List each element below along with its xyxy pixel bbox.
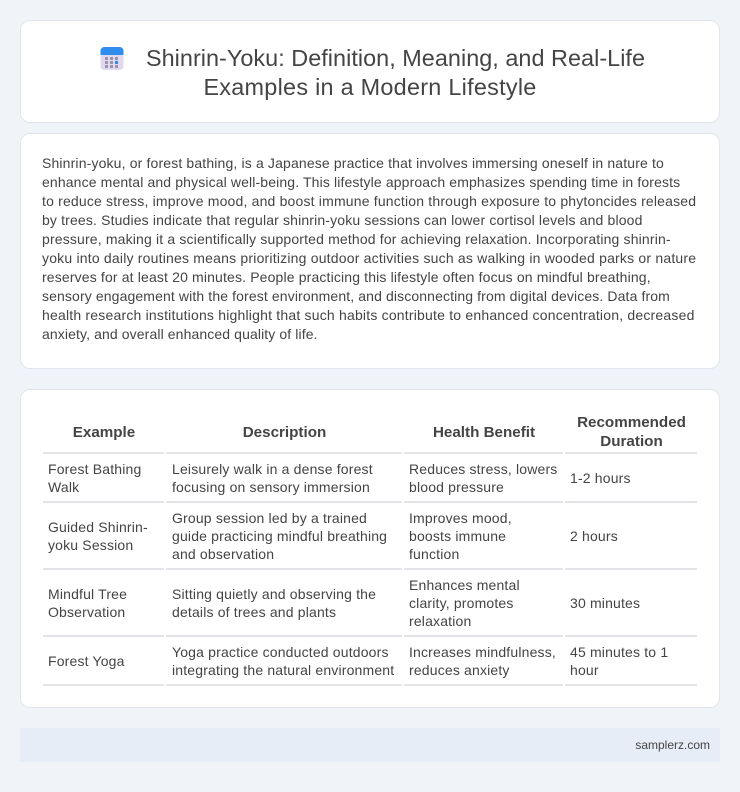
title — [146, 45, 645, 100]
intro paragraph: by trees. Studies indicate that regular shinrin-yoku sessions can lower cortisol levels and blood — [42, 212, 643, 228]
row: Forest Bathing Walk: Walk — [48, 479, 79, 495]
row: Forest Yoga — [48, 644, 668, 678]
row: Forest Bathing Walk: Reduces stress, lowers — [409, 461, 557, 477]
panel: intro text — [20, 133, 720, 369]
row: Mindful Tree Observation: Mindful Tree — [48, 586, 127, 602]
table header: Recommended — [577, 414, 686, 431]
row: Forest Yoga: integrating the natural environment — [172, 662, 394, 678]
row: Forest Bathing Walk: blood pressure — [409, 479, 504, 495]
panel: examples table — [20, 389, 720, 708]
intro paragraph — [42, 155, 696, 342]
row: Mindful Tree Observation: clarity, promotes — [409, 595, 514, 611]
row: Guided Shinrin-yoku Session: boosts immune — [409, 528, 506, 544]
intro paragraph: health research institutions highlight that such habits contribute to enhanced concentration, decreased — [42, 307, 695, 323]
icon: calendar — [100, 47, 124, 70]
footer credit: samplerz.com — [635, 738, 710, 752]
row: Forest Yoga: Increases mindfulness, — [409, 644, 556, 660]
footer — [20, 728, 720, 762]
row: Guided Shinrin-yoku Session: Guided Shinrin- — [48, 519, 148, 535]
row: Guided Shinrin-yoku Session: 2 hours — [570, 528, 618, 544]
table header — [73, 414, 686, 450]
row: Forest Bathing Walk: Leisurely walk in a dense forest — [172, 461, 373, 477]
row: Mindful Tree Observation — [48, 577, 640, 629]
row: Forest Bathing Walk: 1-2 hours — [570, 470, 631, 486]
intro paragraph: sensory engagement with the forest environment, and disconnecting from digital devices. Data from — [42, 288, 670, 304]
intro paragraph: enhance mental and physical well-being. This lifestyle approach emphasizes spending time in forests — [42, 174, 680, 190]
row: Mindful Tree Observation: Observation — [48, 604, 125, 620]
row: Guided Shinrin-yoku Session: Improves mood, — [409, 510, 512, 526]
intro paragraph: reserves for at least 20 minutes. People practicing this lifestyle often focus on mindful breathing, — [42, 269, 651, 285]
row: Mindful Tree Observation: details of trees and plants — [172, 604, 336, 620]
intro paragraph: to reduce stress, improve mood, and boost immune function through exposure to phytoncides released — [42, 193, 696, 209]
row: Mindful Tree Observation: Sitting quietly and observing the — [172, 586, 376, 602]
table header: Description — [243, 424, 326, 441]
row: Forest Yoga: reduces anxiety — [409, 662, 510, 678]
table header: Duration — [600, 433, 663, 450]
intro paragraph: yoku into daily routines means prioritizing outdoor activities such as walking in wooded parks or nature — [42, 250, 696, 266]
row: Guided Shinrin-yoku Session — [48, 510, 618, 562]
row: Guided Shinrin-yoku Session: yoku Session — [48, 537, 133, 553]
intro paragraph: anxiety, and overall enhanced quality of life. — [42, 326, 318, 342]
title card — [20, 20, 720, 123]
row: Forest Bathing Walk: Forest Bathing — [48, 461, 141, 477]
table header: Example — [73, 424, 135, 441]
row: Forest Yoga: 45 minutes to 1 — [570, 644, 668, 660]
intro paragraph: Shinrin-yoku, or forest bathing, is a Japanese practice that involves immersing oneself in nature to — [42, 155, 664, 171]
row: Forest Yoga: hour — [570, 662, 599, 678]
row: Guided Shinrin-yoku Session: guide practicing mindful breathing — [172, 528, 387, 544]
row: Forest Yoga: Forest Yoga — [48, 653, 125, 669]
intro paragraph: pressure, making it a scientifically supported method for achieving relaxation. Incorporating shinrin- — [42, 231, 671, 247]
row: Guided Shinrin-yoku Session: and observation — [172, 546, 274, 562]
row: Guided Shinrin-yoku Session: Group session led by a trained — [172, 510, 367, 526]
row: Guided Shinrin-yoku Session: function — [409, 546, 459, 562]
row: Mindful Tree Observation: Enhances mental — [409, 577, 520, 593]
row: Forest Bathing Walk: focusing on sensory immersion — [172, 479, 370, 495]
row: Mindful Tree Observation: 30 minutes — [570, 595, 640, 611]
row: Forest Bathing Walk — [48, 461, 631, 495]
title: Examples in a Modern Lifestyle — [203, 74, 537, 100]
row: Forest Yoga: Yoga practice conducted outdoors — [172, 644, 389, 660]
table header: Health Benefit — [433, 424, 535, 441]
row: Mindful Tree Observation: relaxation — [409, 613, 471, 629]
title: Shinrin-Yoku: Definition, Meaning, and Real-Life — [146, 45, 645, 71]
